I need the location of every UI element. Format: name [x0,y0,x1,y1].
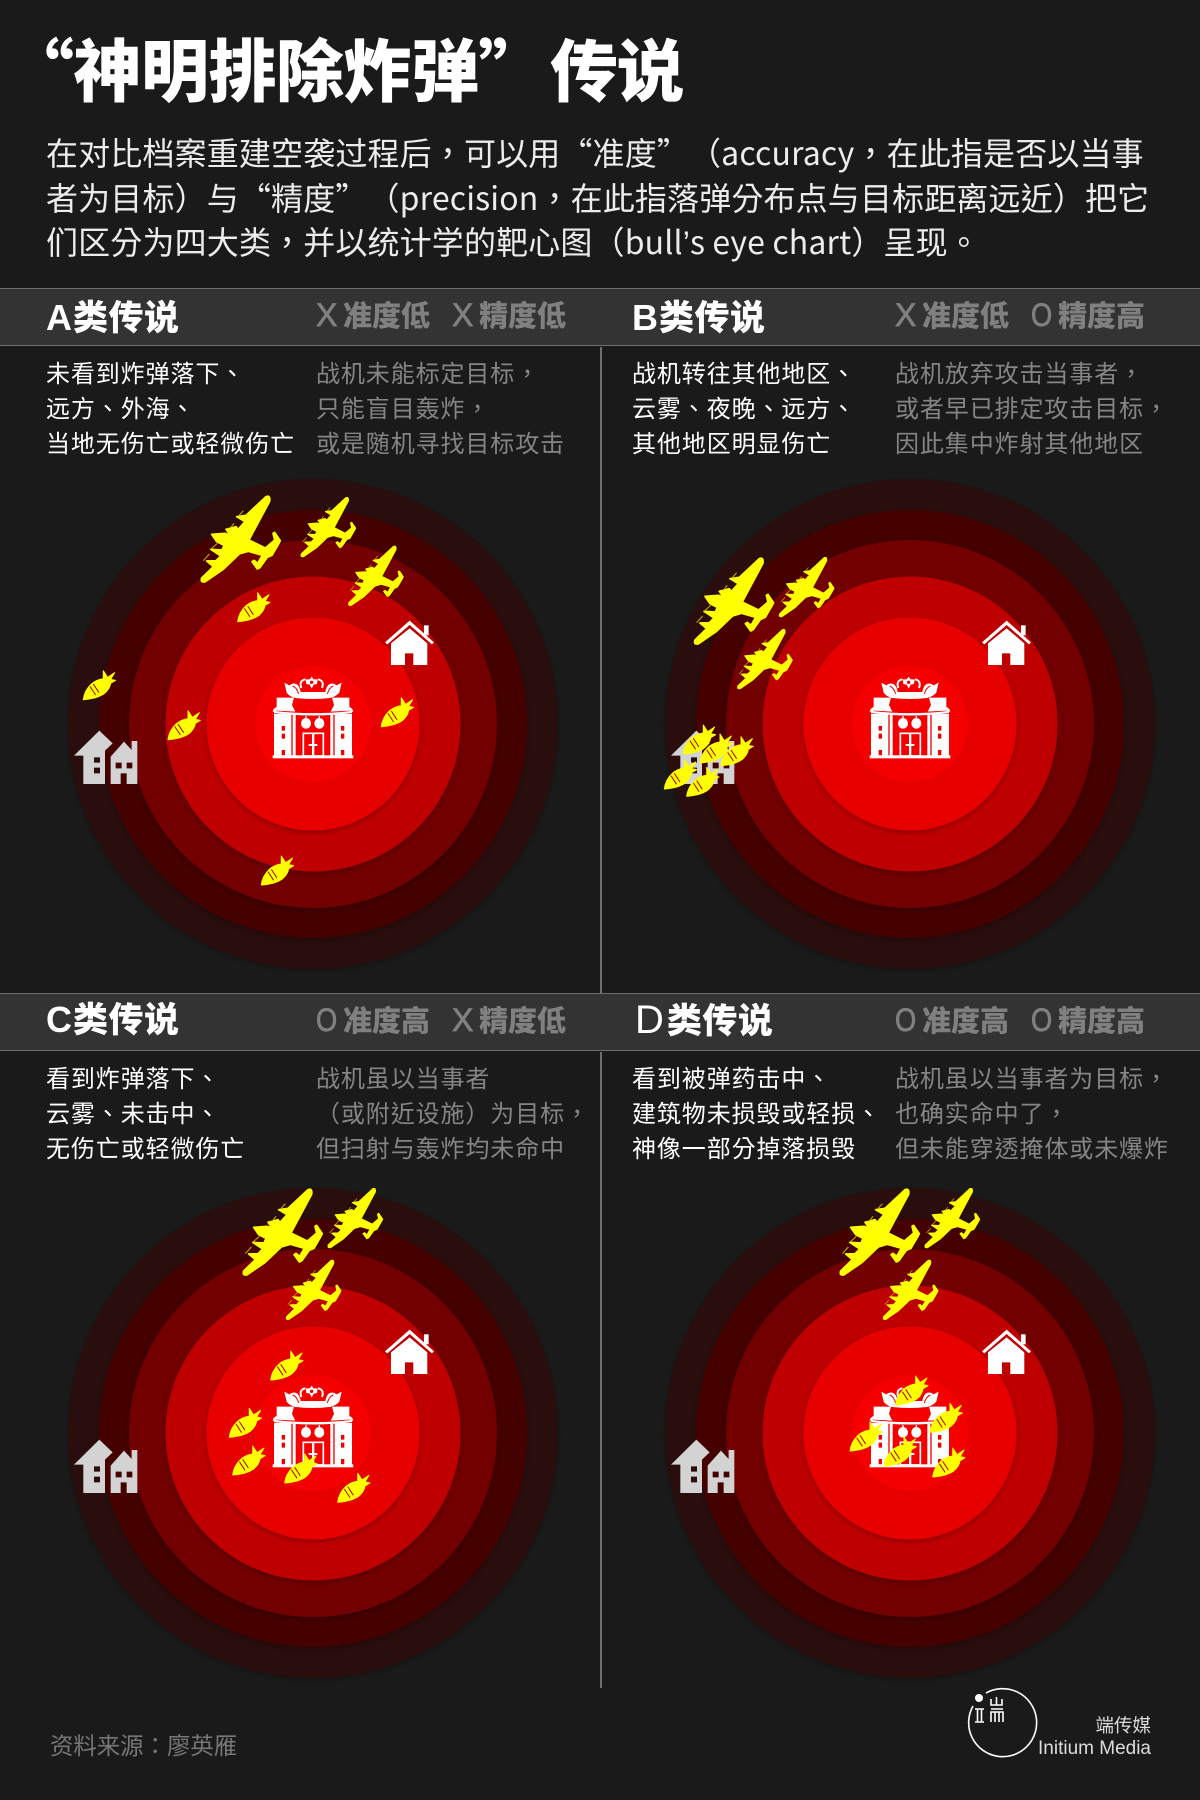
heading: C: C类传说 [46,992,180,1043]
target rings [68,479,558,969]
status: accuracy high, precision low: O [316,1002,337,1038]
target rings [665,1188,1155,1678]
explanation: 或是随机寻找目标攻击 [316,424,565,459]
description: 未看到炸弹落下、 [46,354,245,389]
status: accuracy low, precision low: 准度低 [343,293,430,335]
icon: bombers [840,1188,980,1319]
header band: bottom row [0,993,1200,1051]
status: accuracy high, precision high: 精度高 [1058,998,1145,1040]
explanation [316,1059,590,1164]
icon: temple [273,677,353,758]
status: accuracy low, precision low: 精度低 [479,293,566,335]
status: accuracy high, precision high: O [895,1002,916,1038]
title: 传说 [550,17,683,116]
title: “神明排除炸弹” [6,17,546,116]
status: accuracy high, precision high [895,998,1145,1040]
target rings [68,1188,558,1678]
logo mark [968,1688,1038,1758]
icon: temple [870,1386,950,1467]
description: 看到炸弹落下、 [46,1059,220,1094]
panel: A [46,290,566,969]
icon: white house [385,1330,434,1374]
icon: grey houses [74,731,137,784]
description: 云雾、夜晚、远方、 [632,389,856,424]
status: accuracy high, precision low: 精度低 [479,998,566,1040]
logo text: 端传媒 [1095,1712,1151,1738]
explanation [316,354,565,459]
description: 战机转往其他地区、 [632,354,856,389]
explanation: 但扫射与轰炸均未命中 [316,1129,565,1164]
status: accuracy high, precision low [316,998,566,1040]
icon: bombs [850,1376,965,1477]
icon: bombs [229,1351,370,1502]
explanation: 战机放弃攻击当事者， [895,354,1144,389]
icon: bombers [201,496,403,605]
explanation [895,354,1169,459]
heading: D: D类传说 [635,993,773,1044]
explanation: 战机虽以当事者 [316,1059,490,1094]
explanation: （或附近设施）为目标， [316,1094,590,1129]
panel: D [632,993,1169,1678]
source note: 资料来源：廖英雁 [50,1727,237,1761]
icon: bombers [243,1188,383,1319]
heading: B: B类传说 [632,290,766,341]
description: 远方、外海、 [46,389,195,424]
heading: A: A类传说 [46,290,180,341]
target rings [665,479,1155,969]
icon: bombs [83,593,414,885]
status: accuracy low, precision high [895,293,1145,335]
description: 神像一部分掉落损毁 [632,1129,856,1164]
status: accuracy high, precision high: 准度高 [922,998,1009,1040]
icon: white house [982,1330,1031,1374]
explanation: 因此集中炸射其他地区 [895,424,1144,459]
icon: bombers [695,557,834,689]
intro paragraph [46,129,1149,264]
icon: grey houses [74,1440,137,1493]
status: accuracy low, precision high: O [1031,297,1052,333]
status: accuracy low, precision low: X [452,297,473,333]
explanation: 战机虽以当事者为目标， [895,1059,1169,1094]
status: accuracy low, precision high: 精度高 [1058,293,1145,335]
intro paragraph: 们区分为四大类，并以统计学的靶心图（bull’s eye chart）呈现。 [46,218,980,264]
panel divider: top row [600,347,602,993]
explanation: 也确实命中了， [895,1094,1069,1129]
explanation [895,1059,1169,1164]
description [632,1059,881,1164]
icon: temple [273,1386,353,1467]
status: accuracy low, precision low [316,293,566,335]
panel divider: bottom row [600,1052,602,1688]
chart: bull's eye A [68,479,558,969]
chart: bull's eye B [664,479,1155,969]
description: 看到被弹药击中、 [632,1059,831,1094]
logo text: Initium Media [1038,1738,1151,1759]
description: 云雾、未击中、 [46,1094,220,1129]
description: 无伤亡或轻微伤亡 [46,1129,245,1164]
icon: grey houses [671,1440,734,1493]
chart: bull's eye C [68,1188,558,1678]
status: accuracy low, precision low: X [316,297,337,333]
description: 当地无伤亡或轻微伤亡 [46,424,295,459]
description: 其他地区明显伤亡 [632,424,831,459]
chart: bull's eye D [665,1188,1155,1678]
description [632,354,856,459]
intro paragraph: 在对比档案重建空袭过程后，可以用“准度”（accuracy，在此指是否以当事 [46,129,1144,175]
description: 建筑物未损毁或轻损、 [632,1094,881,1129]
icon: white house [982,621,1031,665]
panel: C [46,992,590,1678]
panel: B [632,290,1169,969]
icon: bombs [664,725,753,796]
logo: Initium Media [968,1688,1151,1759]
header band: top row [0,288,1200,346]
icon: grey houses [671,731,734,784]
description [46,354,295,459]
status: accuracy low, precision high: X [895,297,916,333]
status: accuracy high, precision low: X [452,1002,473,1038]
explanation: 只能盲目轰炸， [316,389,490,424]
icon: white house [385,621,434,665]
icon: temple [870,677,950,758]
status: accuracy low, precision high: 准度低 [922,293,1009,335]
intro paragraph: 者为目标）与“精度”（precision，在此指落弹分布点与目标距离远近）把它 [46,174,1149,220]
status: accuracy high, precision high: O [1031,1002,1052,1038]
description [46,1059,245,1164]
explanation: 但未能穿透掩体或未爆炸 [895,1129,1169,1164]
status: accuracy high, precision low: 准度高 [343,998,430,1040]
explanation: 战机未能标定目标， [316,354,540,389]
explanation: 或者早已排定攻击目标， [895,389,1169,424]
